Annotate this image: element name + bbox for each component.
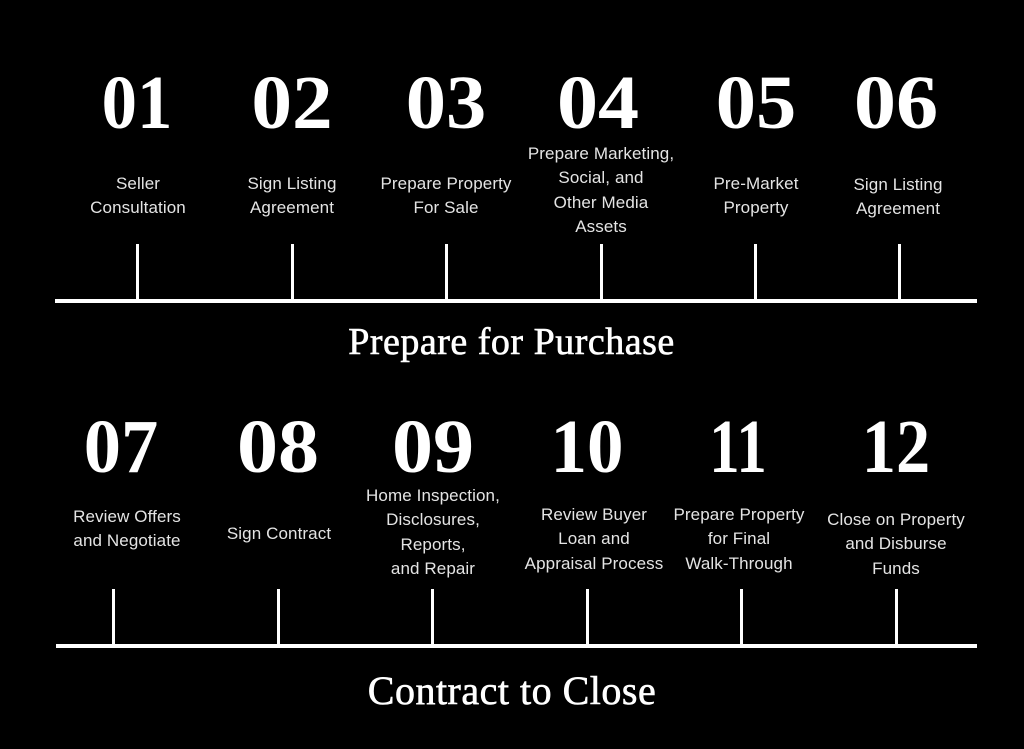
step 03 label: Prepare Property [380, 174, 512, 193]
step 03 label [380, 174, 512, 217]
step 08 number: 08 [236, 405, 319, 489]
step 11 number: 11 [709, 405, 766, 489]
step 12 label: Funds [872, 559, 920, 578]
step 07 number: 07 [84, 405, 158, 489]
step 12 label [827, 510, 965, 578]
step 12 label: Close on Property [827, 510, 965, 529]
step 07 label [73, 507, 181, 550]
step 09 label: Disclosures, [386, 510, 480, 529]
step 09 label: Home Inspection, [366, 486, 500, 505]
step 10 label: Loan and [558, 529, 630, 548]
step 05 number: 05 [716, 61, 796, 145]
heading: prepare for purchase: Prepare for Purchase [348, 321, 675, 363]
step 10 label: Appraisal Process [525, 554, 663, 573]
step 12 number: 12 [862, 405, 930, 489]
step 09 label: and Repair [391, 559, 475, 578]
step 06 number: 06 [853, 61, 938, 145]
step 04 label: Prepare Marketing, [528, 144, 674, 163]
step 11 label: Walk-Through [685, 554, 793, 573]
step 10 label: Review Buyer [541, 505, 647, 524]
step 04 label: Assets [575, 217, 627, 236]
step 05 label: Property [723, 198, 789, 217]
step 12 label: and Disburse [845, 534, 947, 553]
step 02 label [247, 174, 337, 217]
step 11 label: Prepare Property [673, 505, 805, 524]
step 06 label: Sign Listing [853, 175, 943, 194]
step 02 label: Sign Listing [247, 174, 337, 193]
step 11 label: for Final [708, 529, 770, 548]
step 04 label: Social, and [558, 168, 644, 187]
timeline: contract to close [56, 589, 977, 648]
step 01 label: Consultation [90, 198, 186, 217]
step 04 number: 04 [556, 61, 639, 145]
step 07 label: Review Offers [73, 507, 181, 526]
timeline: prepare for purchase [55, 244, 977, 303]
heading: contract to close: Contract to Close [368, 668, 656, 713]
step 07 label: and Negotiate [73, 531, 181, 550]
step 09 label [366, 486, 500, 578]
step 11 label [673, 505, 805, 573]
step 05 label: Pre-Market [713, 174, 799, 193]
step 09 number: 09 [391, 405, 474, 489]
step 01 label: Seller [116, 174, 160, 193]
step 06 label [853, 175, 943, 218]
step 05 label [713, 174, 799, 217]
step 03 number: 03 [406, 61, 486, 145]
step 04 label: Other Media [554, 193, 648, 212]
step 02 number: 02 [251, 61, 332, 145]
step 06 label: Agreement [856, 199, 940, 218]
step 02 label: Agreement [250, 198, 334, 217]
step 10 number: 10 [551, 405, 623, 489]
step 10 label [524, 505, 663, 573]
step 04 label [528, 144, 674, 236]
step 03 label: For Sale [413, 198, 479, 217]
step 01 label [90, 174, 186, 217]
step 01 number: 01 [102, 61, 172, 145]
step 09 label: Reports, [400, 535, 466, 554]
step 08 label: Sign Contract [227, 524, 331, 543]
